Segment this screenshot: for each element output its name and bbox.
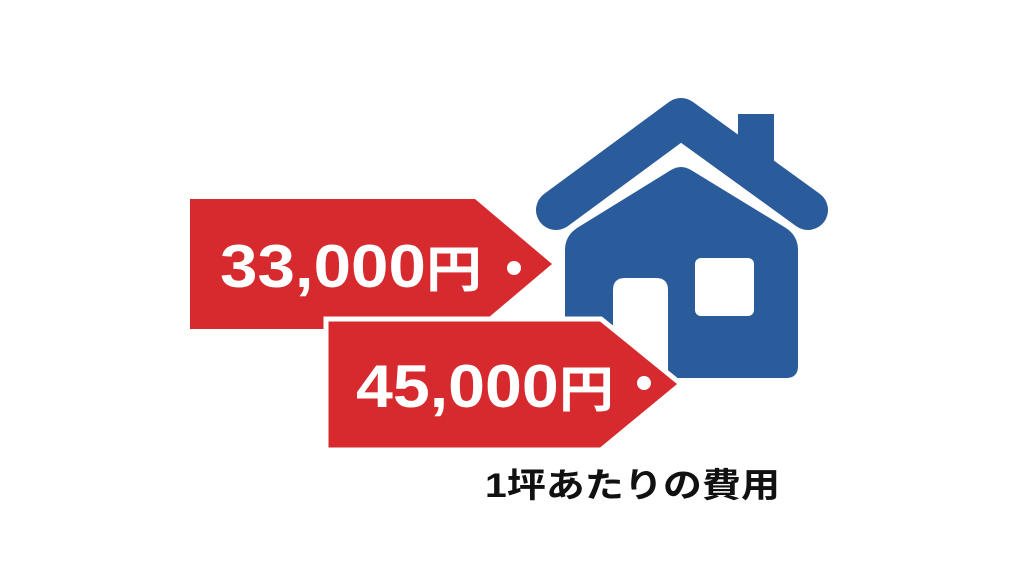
house roof xyxy=(556,118,808,210)
price tag: 33,000円: 33,000 円 xyxy=(220,233,482,300)
caption: 1坪あたりの費用 xyxy=(485,467,780,505)
house chimney xyxy=(738,114,774,184)
door xyxy=(613,278,668,380)
price tag: 45,000円 xyxy=(326,319,681,450)
price tag: 33,000円 xyxy=(190,199,552,329)
price tag: 45,000円: 45,000 円 xyxy=(356,353,614,420)
icon: house xyxy=(556,114,808,380)
house body xyxy=(565,167,798,378)
window xyxy=(695,258,754,316)
